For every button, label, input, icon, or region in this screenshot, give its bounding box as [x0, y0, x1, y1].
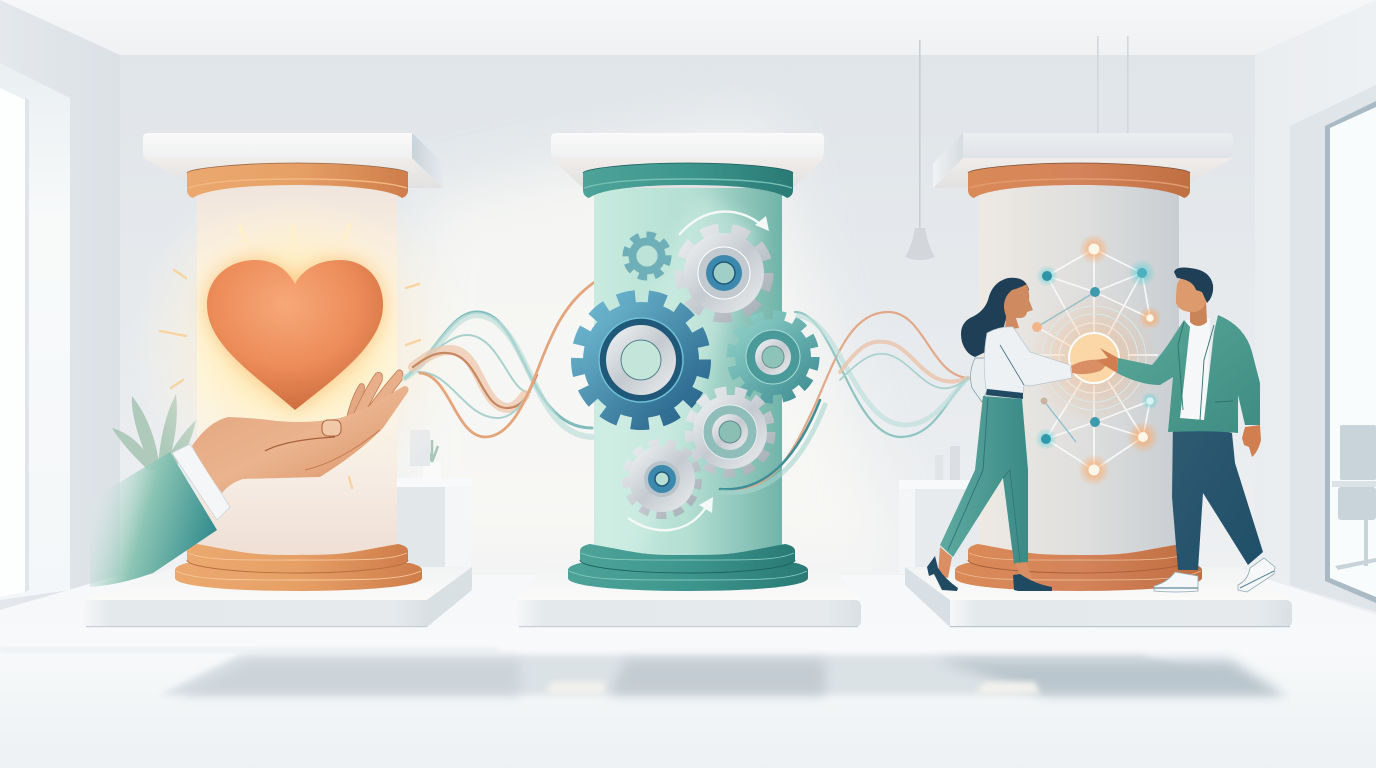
trousers	[940, 396, 1028, 564]
flow waves: heart to gears	[405, 272, 612, 437]
ankles	[938, 547, 952, 578]
hand	[1071, 360, 1106, 374]
platform	[905, 567, 1292, 627]
column	[197, 180, 397, 555]
sparkle rays	[160, 224, 420, 488]
background office chair	[1332, 425, 1376, 570]
column	[594, 180, 782, 555]
background shelf right	[899, 446, 984, 574]
icon: heart	[207, 260, 383, 410]
icon: small teal gear	[626, 235, 668, 277]
column	[979, 180, 1179, 555]
icon: cuff	[172, 444, 230, 520]
network diagram	[1029, 234, 1162, 486]
icon: large blue gear	[578, 297, 704, 423]
icon: silver gear lower	[689, 391, 771, 473]
network nodes	[1032, 234, 1162, 486]
head	[1004, 284, 1033, 330]
heart glow	[197, 232, 397, 422]
icon: silver gear bottom	[626, 443, 698, 515]
hair	[961, 278, 1029, 357]
base rings	[568, 544, 808, 591]
blouse	[984, 327, 1072, 393]
hanging lamp	[905, 36, 1129, 260]
trousers	[1172, 418, 1263, 570]
belt	[986, 389, 1023, 399]
icon: teal gear right	[731, 315, 815, 399]
flow arrowhead	[606, 268, 619, 281]
arrow: rotation top	[679, 212, 769, 235]
icon: open hand	[192, 370, 408, 493]
panel: people pillar	[905, 133, 1292, 627]
column light band	[594, 190, 760, 560]
neck and head	[1190, 300, 1207, 326]
base rings	[175, 544, 422, 591]
shirt	[1178, 318, 1210, 422]
capital	[143, 133, 443, 198]
background plant	[112, 394, 196, 474]
outer glow	[130, 170, 470, 510]
hair	[1174, 268, 1213, 303]
flow waves: gears to people	[720, 312, 968, 493]
panel: gears pillar	[516, 133, 861, 627]
background shelf left	[397, 430, 472, 572]
arrow: rotation bottom	[628, 497, 713, 530]
base rings	[955, 544, 1202, 591]
icon: silver gear top right	[680, 229, 768, 317]
shoes	[927, 556, 958, 591]
figure: woman	[927, 278, 1106, 591]
jacket	[1117, 315, 1260, 433]
heart halo	[207, 260, 383, 410]
icon: sleeve	[90, 452, 217, 587]
capital	[551, 133, 824, 198]
capital	[933, 133, 1233, 198]
figure: man	[1096, 268, 1275, 592]
platform	[83, 567, 472, 627]
shoes	[1154, 558, 1275, 592]
platform	[516, 567, 861, 627]
back sash	[971, 358, 988, 402]
panel: heart pillar	[83, 133, 472, 627]
hands	[1096, 348, 1118, 373]
